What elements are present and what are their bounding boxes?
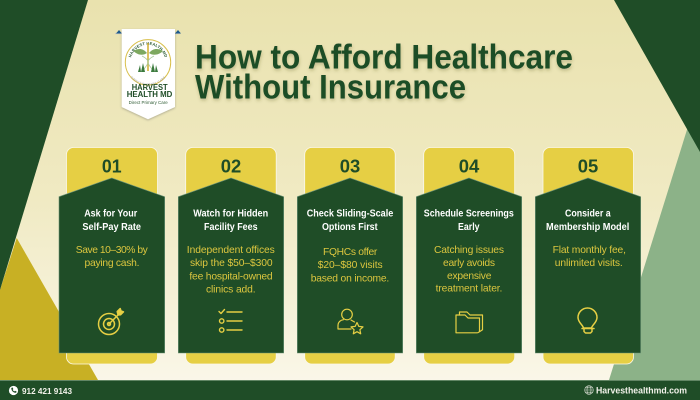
card 4: 04 [459, 156, 480, 177]
icon: folder [456, 312, 482, 333]
card 4: expensive [447, 271, 492, 282]
phone number: 912 421 9143 [22, 387, 72, 396]
icon: target [98, 308, 124, 334]
card 5: unlimited visits. [555, 258, 623, 269]
card 1: Save 10–30% by [76, 245, 149, 256]
shape: dark green top right [614, 0, 700, 152]
logo banner [115, 29, 181, 121]
icon: phone [9, 386, 18, 395]
card 2: fee hospital-owned [189, 272, 273, 282]
card 1 [59, 148, 165, 364]
card 2 [178, 148, 284, 364]
logo banner: HARVEST [132, 83, 168, 92]
card 4: treatment later. [436, 284, 502, 295]
card 5: Membership Model [546, 222, 630, 233]
card 4: early avoids [443, 258, 495, 269]
card 5: Consider a [565, 208, 611, 220]
card 5: 05 [578, 156, 598, 177]
card 3: $20–$80 visits [318, 260, 383, 271]
card 3: 03 [340, 156, 360, 177]
card 5: Flat monthly fee, [553, 245, 626, 256]
card 3: Check Sliding-Scale [307, 208, 394, 220]
logo banner: DIRECT PRIMARY CARE [130, 76, 166, 86]
card 2: skip the $50–$300 [190, 258, 273, 269]
card 2: 02 [221, 156, 241, 177]
card 1: 01 [102, 156, 122, 177]
card 3: based on income. [311, 274, 389, 285]
card 4: Catching issues [434, 245, 504, 256]
card 3 [297, 148, 403, 364]
logo banner: Direct Primary Care [129, 100, 168, 105]
card 1: Ask for Your [84, 208, 137, 220]
title: How to Afford Healthcare [195, 38, 573, 76]
title: Without Insurance [195, 68, 466, 106]
shape: dark green left [0, 0, 88, 290]
shape: light green right [609, 88, 700, 380]
card 1: Self-Pay Rate [82, 222, 141, 233]
card 2: Facility Fees [204, 222, 258, 233]
icon: person with star [338, 309, 363, 334]
card 4: Early [458, 222, 480, 233]
website: Harvesthealthmd.com [596, 386, 687, 396]
card 2: clinics add. [206, 285, 256, 296]
card 4 [416, 148, 522, 364]
card 4: Schedule Screenings [424, 208, 514, 220]
card 2: Independent offices [187, 245, 275, 256]
icon: globe [585, 386, 593, 394]
card 3: FQHCs offer [323, 247, 378, 258]
footer bar [0, 380, 700, 400]
icon: light bulb [578, 308, 597, 333]
card 2: Watch for Hidden [193, 208, 268, 220]
card 1: paying cash. [84, 258, 140, 269]
card 5 [535, 148, 641, 364]
shape: olive corner [0, 238, 98, 380]
title [195, 38, 573, 106]
card 3: Options First [322, 222, 378, 233]
logo banner: HARVEST HEALTH MD [128, 42, 167, 58]
logo banner: HEALTH MD [127, 90, 173, 99]
icon: checklist [219, 310, 242, 332]
